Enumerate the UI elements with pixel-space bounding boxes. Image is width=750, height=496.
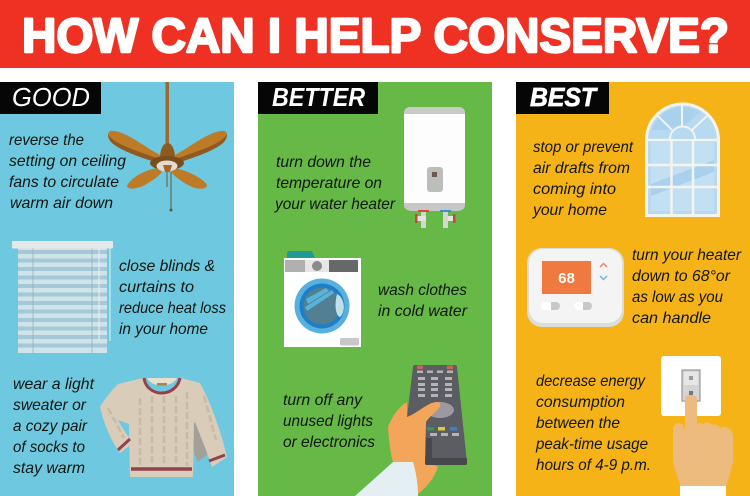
text: stop or prevent drafts: stop or prevent: [533, 139, 634, 156]
text: decrease energy consumption: decrease energy: [536, 373, 646, 390]
heading: best: [516, 82, 609, 114]
panel: better: [258, 82, 492, 496]
text: decrease energy consumption: [535, 373, 651, 474]
text: turn your heater down: down to 68°or: [632, 268, 731, 285]
icon: window blinds: [12, 241, 113, 353]
panel: good: [0, 82, 234, 496]
icon: water heater: [404, 107, 465, 228]
icon: arched window: [645, 102, 720, 217]
icon: washing machine: [284, 251, 361, 347]
text: wear a light sweater: of socks to: [13, 439, 85, 456]
text: turn your heater down: can handle: [632, 310, 711, 327]
heading: better: BETTER: [272, 82, 365, 112]
text: turn down the temperature: temperature on: [276, 175, 382, 192]
text: turn off electronics: or electronics: [283, 434, 375, 451]
text: wash clothes: [378, 282, 468, 320]
icon: thermostat: [527, 248, 624, 327]
icon: ceiling fan: [108, 82, 227, 212]
text: stop or prevent drafts: coming into: [533, 181, 616, 198]
text: reverse the setting: fans to circulate: [9, 174, 119, 191]
text: close blinds: [119, 258, 226, 338]
text: reverse the setting: reverse the: [9, 132, 84, 149]
text: turn down the temperature: turn down the: [276, 154, 371, 171]
text: decrease energy consumption: consumption: [536, 394, 625, 411]
text: decrease energy consumption: peak-time usage: [535, 436, 648, 453]
text: stop or prevent drafts: your home: [532, 202, 607, 219]
text: wash clothes: wash clothes: [378, 282, 467, 299]
text: wear a light sweater: stay warm: [13, 460, 85, 477]
text: wear a light sweater: a cozy pair: [13, 418, 88, 435]
text: close blinds: in your home: [119, 321, 208, 338]
icon: sweater: [100, 378, 227, 477]
text: reverse the setting: [9, 132, 126, 212]
text: turn your heater down: [632, 247, 742, 327]
text: decrease energy consumption: between the: [536, 415, 620, 432]
text: reverse the setting: warm air down: [10, 195, 113, 212]
panel: best: [516, 82, 750, 496]
heading: best: BEST: [530, 82, 598, 112]
text: wear a light sweater: sweater or: [13, 397, 87, 414]
heading: good: GOOD: [12, 82, 90, 112]
text: close blinds: close blinds &: [119, 258, 215, 275]
text: turn down the temperature: [274, 154, 396, 213]
icon: thermostat: 68: [558, 270, 575, 287]
text: turn your heater down: as low as you: [632, 289, 723, 306]
text: decrease energy consumption: hours of 4-9 p.m.: [536, 457, 651, 474]
text: turn your heater down: turn your heater: [632, 247, 742, 264]
text: stop or prevent drafts: [532, 139, 634, 219]
text: close blinds: reduce heat loss: [119, 300, 226, 317]
text: wear a light sweater: wear a light: [13, 376, 95, 393]
text: turn off electronics: turn off any: [283, 392, 363, 409]
icon: light switch and hand: [661, 356, 733, 496]
text: wear a light sweater: [13, 376, 95, 477]
text: turn off electronics: unused lights: [283, 413, 373, 430]
text: reverse the setting: setting on ceiling: [9, 153, 126, 170]
title banner: [0, 0, 750, 68]
icon: hand holding remote: [355, 365, 467, 496]
text: wash clothes: in cold water: [378, 303, 468, 320]
text: turn off electronics: [283, 392, 375, 451]
text: stop or prevent drafts: air drafts from: [533, 160, 630, 177]
text: turn down the temperature: your water heater: [274, 196, 396, 213]
text: close blinds: curtains to: [119, 279, 194, 296]
title: HOW CAN I HELP CONSERVE?: [22, 10, 729, 63]
